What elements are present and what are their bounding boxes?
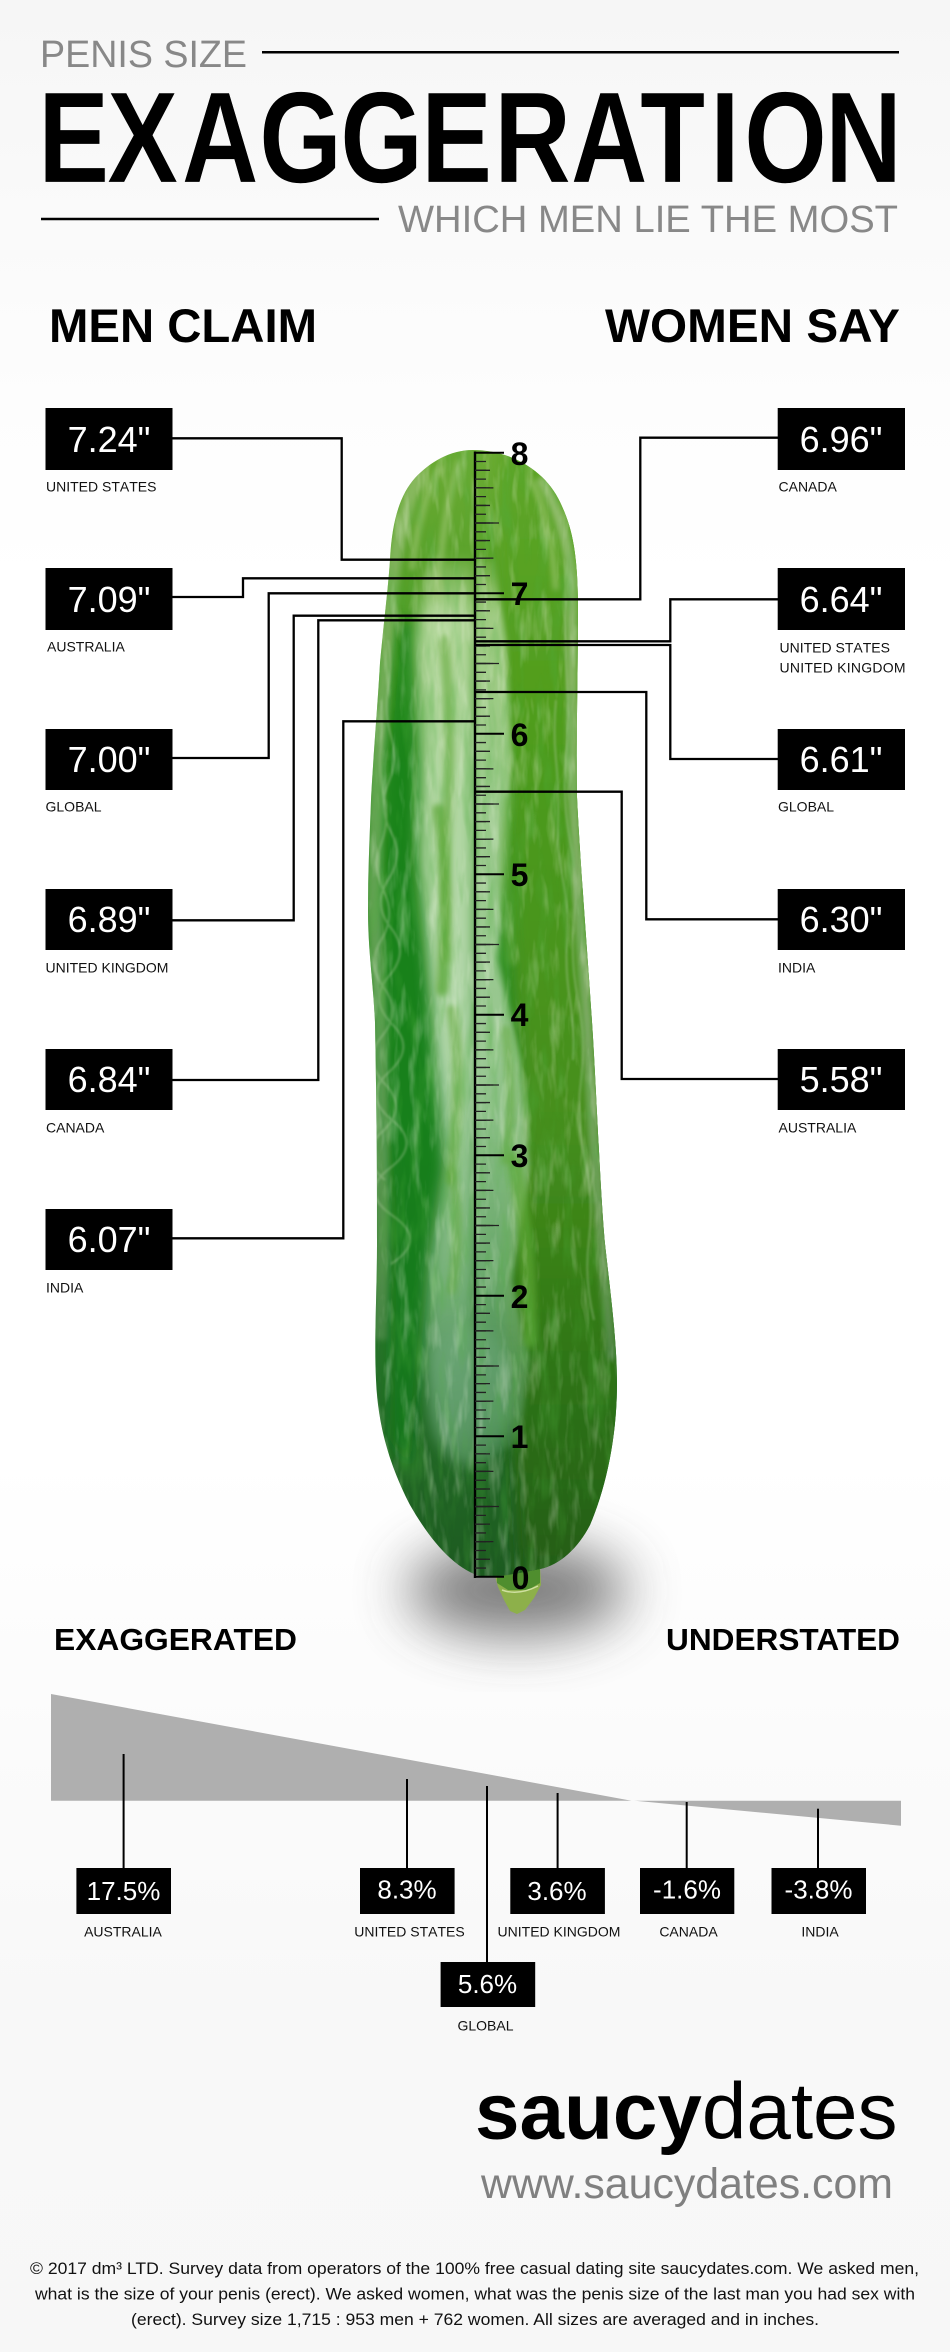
callout: united states 8.3%: UNITED STATES (354, 1924, 465, 1940)
callout: united kingdom 6.89: 6.89" (68, 899, 150, 940)
callout: united states 8.3% (354, 1779, 465, 1940)
callout: australia 5.58: 5.58" (800, 1059, 882, 1100)
callout: united kingdom 3.6%: UNITED KINGDOM (498, 1924, 620, 1940)
callout: australia 7.09: 7.09" (68, 579, 150, 620)
callout: australia 17.5% (76, 1754, 171, 1940)
callout: united states 7.24: UNITED STATES (46, 478, 156, 494)
right edge ribs (540, 478, 612, 1360)
callout: global 6.61: 6.61" (800, 739, 882, 780)
ruler numbers: 7 (511, 576, 528, 612)
footer note: (erect). Survey size 1,715 : 953 men + 762 women. All sizes are averaged and in inches. (131, 2310, 819, 2329)
callout: canada -1.6% (640, 1802, 734, 1940)
callout: united states 8.3%: 8.3% (377, 1874, 437, 1904)
callout: india 6.07: INDIA (46, 1280, 84, 1296)
connectors: women say (475, 438, 778, 1079)
callout: india -3.8%: INDIA (801, 1924, 839, 1940)
ruler numbers: 0 (512, 1560, 529, 1596)
kicker: penis size: PENIS SIZE (40, 34, 247, 76)
callout: australia 17.5%: 17.5% (87, 1876, 160, 1906)
callout: global 7.00: 7.00" (68, 739, 150, 780)
callout: canada 6.96: 6.96" (800, 419, 882, 460)
connectors: men claim (172, 438, 475, 1238)
callout: global 5.6%: GLOBAL (457, 2018, 514, 2034)
callout: canada 6.84 (46, 1049, 172, 1136)
ruler numbers: 4 (511, 997, 529, 1033)
callout: global 5.6%: 5.6% (458, 1969, 517, 1999)
callout: australia 5.58: AUSTRALIA (778, 1120, 857, 1136)
logo: saucydates: saucydates (475, 2067, 898, 2156)
pale left band (416, 560, 476, 1490)
header: title block (38, 34, 902, 241)
heading: understated: UNDERSTATED (666, 1622, 900, 1657)
top dome stripes (412, 460, 556, 600)
callout: united kingdom 3.6%: 3.6% (527, 1876, 587, 1906)
ruler numbers: 2 (511, 1279, 528, 1315)
callout: global 6.61 (778, 729, 905, 814)
callout: united states 7.24 (46, 408, 172, 494)
dark stripe (380, 620, 446, 1470)
callout: india 6.30: INDIA (778, 960, 816, 976)
ruler numbers: 8 (511, 436, 528, 472)
callout: canada 6.84: CANADA (46, 1120, 105, 1136)
callout: canada 6.84: 6.84" (68, 1059, 150, 1100)
cucumber body (360, 445, 625, 1585)
ruler numbers: 5 (511, 857, 528, 893)
callout: india 6.30 (778, 889, 905, 976)
callout: canada 6.96: CANADA (778, 478, 838, 494)
footer note: © 2017 dm³ LTD. Survey data from operators of the 100% free casual dating site saucydates.com. We asked men, (30, 2259, 919, 2278)
callout: canada -1.6%: -1.6% (653, 1874, 721, 1904)
callout: india -3.8% (772, 1809, 866, 1940)
panel: men claim values (46, 408, 172, 1296)
callout: united kingdom 6.89: UNITED KINGDOM (46, 960, 168, 976)
callout: global 6.61: GLOBAL (778, 798, 834, 814)
heading: women say: WOMEN SAY (605, 299, 900, 352)
footer note (30, 2259, 919, 2329)
right side flesh (498, 445, 625, 1585)
panel: women say values (778, 408, 906, 1136)
ruler numbers (511, 436, 529, 1596)
callout: global 5.6% (441, 1786, 535, 2034)
callout: us and uk 6.64: UNITED KINGDOM (780, 660, 906, 676)
callout: india 6.07 (46, 1209, 172, 1296)
pale right band (476, 560, 530, 1470)
url: www.saucydates.com: www.saucydates.com (480, 2161, 893, 2208)
callout: india 6.07: 6.07" (68, 1219, 150, 1260)
callout: us and uk 6.64: 6.64" (800, 579, 882, 620)
callout: canada -1.6%: CANADA (659, 1924, 718, 1940)
callout: united kingdom 3.6% (498, 1793, 620, 1940)
skin texture (360, 445, 625, 1585)
heading: men claim: MEN CLAIM (49, 299, 317, 352)
title: exaggeration: EXAGGERATION (38, 65, 902, 211)
chart: exaggeration wedge (51, 1694, 901, 1826)
chart callouts (76, 1754, 866, 2034)
footer note: what is the size of your penis (erect). We asked women, what was the penis size of the last man you had sex with (34, 2284, 915, 2304)
ruler (475, 436, 529, 1596)
callout: canada 6.96 (778, 408, 905, 494)
subtitle: which men lie the most: WHICH MEN LIE THE MOST (398, 199, 898, 241)
callout: australia 17.5%: AUSTRALIA (84, 1924, 163, 1940)
callout: australia 7.09: AUSTRALIA (47, 638, 125, 654)
ruler numbers: 3 (511, 1138, 528, 1174)
callout: us and uk 6.64 (778, 568, 906, 676)
fine ribs (370, 600, 594, 1320)
ruler numbers: 6 (511, 717, 528, 753)
callout: united kingdom 6.89 (46, 889, 172, 976)
callout: australia 5.58 (778, 1049, 905, 1136)
callout: australia 7.09 (46, 568, 172, 654)
heading: exaggerated: EXAGGERATED (54, 1622, 297, 1657)
callout: global 7.00: GLOBAL (46, 798, 102, 814)
callout: us and uk 6.64: UNITED STATES (780, 640, 890, 656)
callout: global 7.00 (46, 729, 172, 814)
callout: india -3.8%: -3.8% (785, 1874, 852, 1904)
callout: india 6.30: 6.30" (800, 899, 882, 940)
lower highlight (428, 1325, 512, 1465)
cucumber stem (494, 1566, 541, 1614)
ruler numbers: 1 (511, 1419, 528, 1455)
illustration: cucumber (360, 445, 625, 1614)
left edge ribs (374, 470, 420, 1340)
shadow under cucumber (407, 1544, 627, 1636)
green streaks (438, 640, 530, 1340)
callout: united states 7.24: 7.24" (68, 419, 150, 460)
